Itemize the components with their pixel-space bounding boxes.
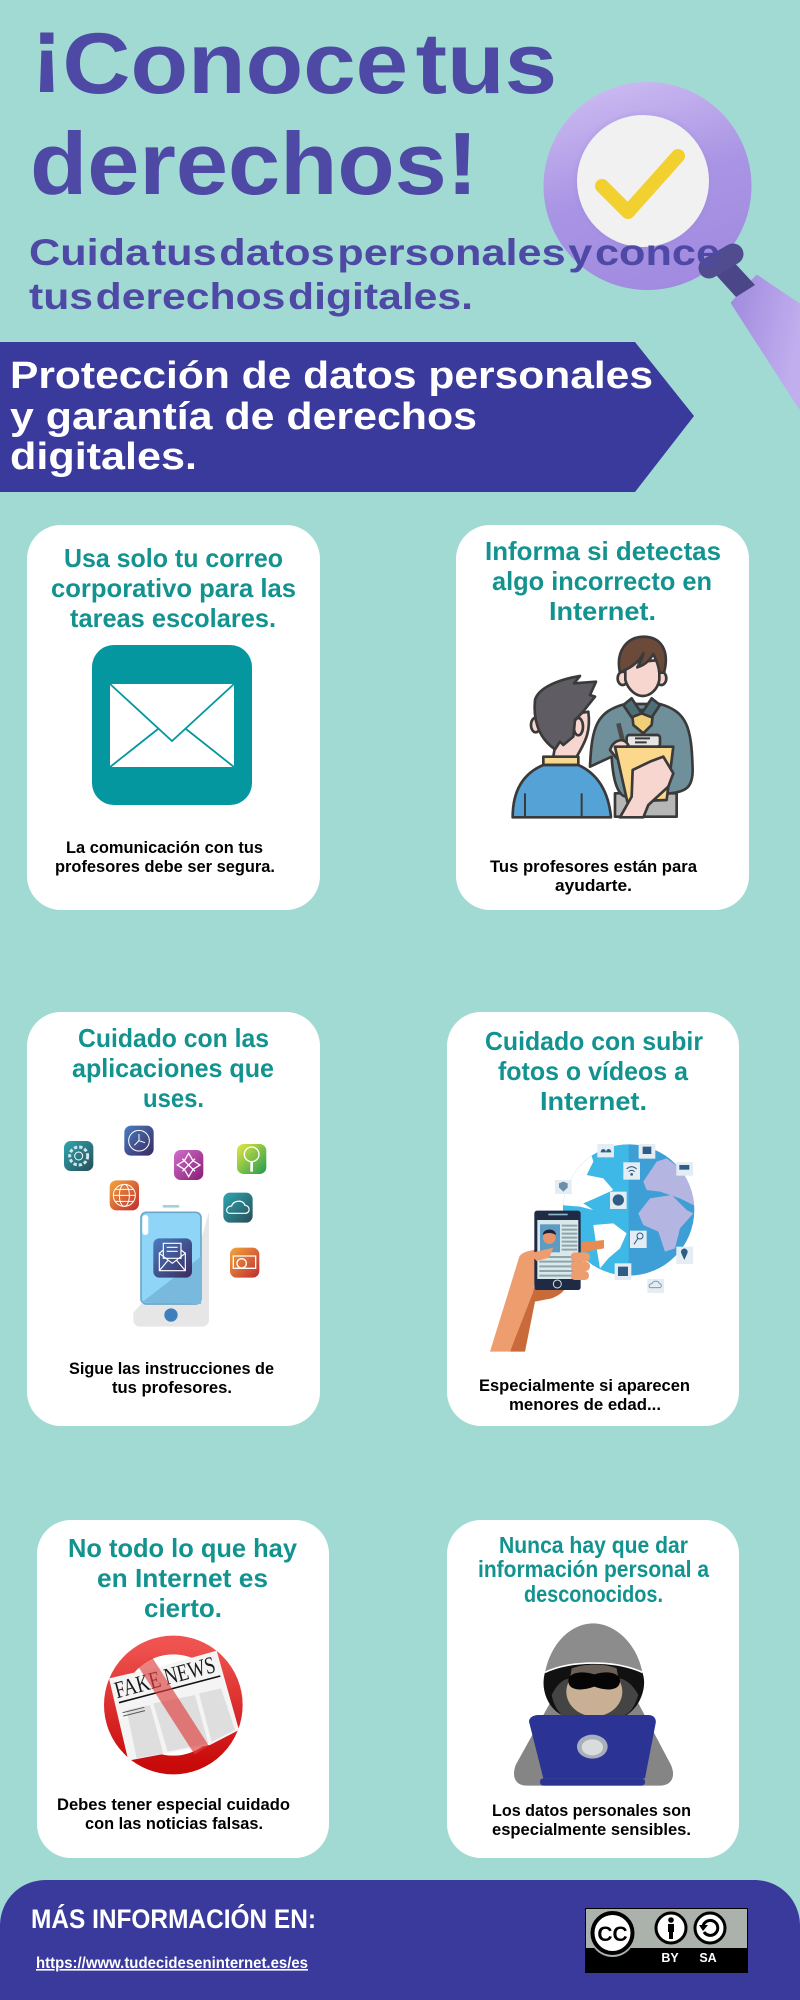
title: derechos! (30, 114, 478, 213)
card heading (51, 543, 296, 633)
subtitle: tus derechos digitales. (29, 276, 473, 317)
card text: con las noticias falsas. (85, 1814, 263, 1833)
card heading: desconocidos. (524, 1581, 663, 1607)
icon: Creative Commons BY-SA badge: BY (661, 1951, 679, 1965)
app: cloud (223, 1193, 253, 1223)
panel: correo corporativo (27, 525, 320, 910)
card text (57, 1795, 290, 1833)
banner arrow (0, 342, 694, 492)
card heading: Cuidado con las (78, 1023, 269, 1053)
icon: Creative Commons BY-SA badge (585, 1908, 748, 1973)
footer (0, 1880, 800, 2000)
card heading: información personal a (478, 1556, 710, 1582)
icon: Creative Commons BY-SA badge: CC (597, 1923, 628, 1946)
card heading: Internet. (540, 1086, 647, 1116)
card heading: cierto. (144, 1593, 222, 1623)
card text (55, 838, 275, 876)
app: search (237, 1144, 266, 1174)
footer heading: MÁS INFORMACIÓN EN: (31, 1903, 316, 1934)
panel: aplicaciones (27, 1012, 320, 1426)
card text: profesores debe ser segura. (55, 857, 275, 876)
card heading (478, 1532, 710, 1607)
card text: Especialmente si aparecen (479, 1376, 690, 1395)
card heading: en Internet es (97, 1563, 268, 1593)
subtitle: Cuida tus datos personales y conce (29, 232, 720, 273)
card heading: No todo lo que hay (68, 1533, 298, 1563)
title (30, 1, 557, 213)
panel: noticias falsas (37, 1520, 329, 1858)
icon: fake news prohibited: FAKE NEWS (112, 1652, 218, 1704)
card heading: Nunca hay que dar (499, 1532, 688, 1558)
card heading: tareas escolares. (70, 603, 276, 633)
icon: envelope (92, 645, 252, 805)
card heading (72, 1023, 274, 1113)
card heading: corporativo para las (51, 573, 296, 603)
card heading: algo incorrecto en (492, 566, 712, 596)
card heading: fotos o vídeos a (498, 1056, 689, 1086)
card heading: Usa solo tu correo (64, 543, 283, 573)
icon: globe and phone in hand (490, 1144, 697, 1352)
banner heading: Protección de datos personales (10, 355, 653, 397)
panel: desconocidos (447, 1520, 739, 1858)
card heading: Internet. (549, 596, 656, 626)
card text: Debes tener especial cuidado (57, 1795, 290, 1814)
panel: fotos o videos (447, 1012, 739, 1426)
card text: La comunicación con tus (66, 838, 263, 857)
card heading (485, 536, 721, 626)
tiles around globe (555, 1144, 693, 1293)
card heading (485, 1026, 703, 1116)
card text (492, 1801, 691, 1839)
footer link: https://www.tudecideseninternet.es/es (36, 1955, 308, 1972)
card text: Los datos personales son (492, 1801, 691, 1820)
panel: informa (456, 525, 749, 910)
card text (490, 857, 698, 895)
card text (479, 1376, 690, 1414)
app: clock (124, 1126, 154, 1156)
card text: menores de edad... (509, 1395, 661, 1414)
icon: phone and app icons (64, 1126, 266, 1327)
icon: student and teacher (513, 637, 693, 817)
title: ¡ (31, 1, 62, 97)
title: Conoce tus (62, 16, 557, 112)
icon: fake news prohibited (109, 1645, 239, 1765)
card text (69, 1359, 274, 1397)
card text: Tus profesores están para (490, 857, 698, 876)
app: compass (174, 1150, 203, 1180)
card text: ayudarte. (555, 876, 632, 895)
card heading: Informa si detectas (485, 536, 721, 566)
icon: hooded hacker with laptop (514, 1623, 673, 1786)
banner heading: y garantía de derechos (10, 396, 477, 438)
app: camera (230, 1248, 259, 1278)
app: globe (110, 1180, 139, 1210)
icon: magnifying glass with check mark (544, 82, 800, 407)
card heading: Cuidado con subir (485, 1026, 703, 1056)
card text: tus profesores. (112, 1378, 232, 1397)
app: gear (64, 1141, 93, 1171)
banner heading: digitales. (10, 436, 197, 478)
icon: Creative Commons BY-SA badge: SA (699, 1951, 717, 1965)
card text: Sigue las instrucciones de (69, 1359, 274, 1378)
card text: especialmente sensibles. (492, 1820, 691, 1839)
subtitle (29, 232, 720, 317)
card heading (68, 1533, 298, 1623)
card heading: uses. (143, 1083, 204, 1113)
card heading: aplicaciones que (72, 1053, 274, 1083)
banner heading (10, 355, 653, 478)
